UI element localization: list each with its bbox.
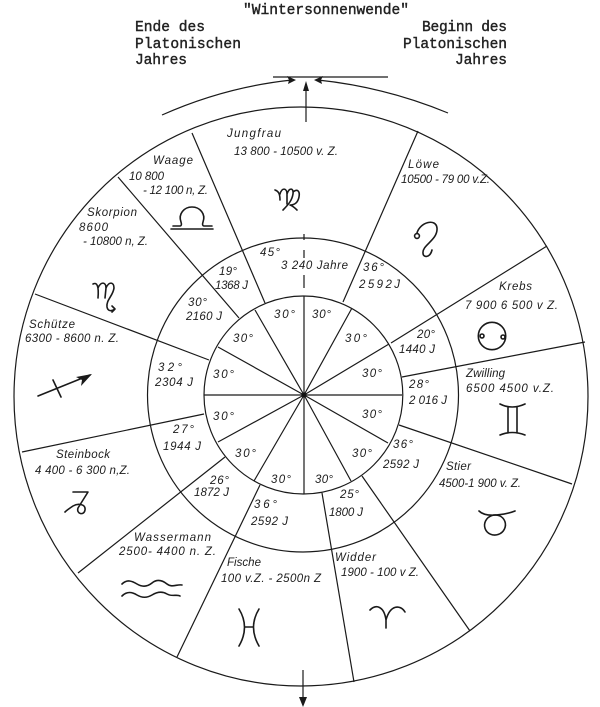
sign: Waage [129, 155, 213, 229]
text block: Ende des Platonischen Jahres: Ende des [135, 20, 205, 36]
sign: Steinbock [35, 449, 130, 514]
icon: Taurus symbol [479, 511, 515, 538]
inner ring labels: 30 degrees [213, 309, 382, 486]
middle ring labels: degrees and years: 27° [172, 424, 194, 436]
icon: Sagittarius symbol [38, 374, 92, 397]
sign: Widder: Widder [335, 552, 377, 564]
sign: Wassermann: Wassermann [134, 532, 211, 544]
icon: Aquarius symbol [122, 580, 182, 597]
sign: Wassermann: 2500- 4400 n. Z. [118, 546, 216, 558]
middle ring labels: degrees and years: 3 240 Jahre [281, 260, 348, 272]
inner ring labels: 30 degrees: 30° [312, 309, 331, 321]
sign: Löwe [401, 159, 490, 256]
middle ring labels: degrees and years: 2 016 J [408, 395, 447, 407]
middle ring labels: degrees and years: 30° [188, 297, 207, 309]
middle ring labels: degrees and years: 1800 J [329, 507, 363, 519]
sign: Skorpion: - 10800 n, Z. [83, 236, 148, 248]
icon: Libra symbol [171, 207, 213, 229]
icon: Leo symbol [415, 222, 437, 256]
middle ring labels: degrees and years: 2304 J [154, 377, 193, 389]
middle ring labels: degrees and years: 1944 J [163, 441, 201, 453]
sign: Stier: Stier [446, 461, 472, 473]
middle ring labels: degrees and years: 28° [408, 379, 429, 391]
icon: Capricorn symbol [65, 492, 88, 514]
dashed axis [303, 234, 305, 288]
sign: Schütze [25, 319, 119, 397]
inner ring labels: 30 degrees: 30° [345, 333, 367, 345]
icon: Gemini symbol [500, 404, 525, 435]
sign: Widder: 1900 - 100 v Z. [341, 567, 419, 579]
chart: zodiac wheel [14, 107, 588, 686]
sign: Steinbock: Steinbock [56, 449, 111, 461]
icon: Pisces symbol [239, 609, 259, 646]
middle ring labels: degrees and years: 1368 J [215, 280, 248, 292]
sign: Krebs: 7 900 6 500 v Z. [465, 300, 558, 312]
sign: Stier: 4500-1 900 v. Z. [439, 478, 521, 490]
sign: Fische [221, 557, 322, 646]
sign: Skorpion [79, 207, 148, 312]
middle ring labels: degrees and years: 2592 J [250, 516, 288, 528]
inner ring labels: 30 degrees: 30° [362, 409, 382, 421]
inner ring labels: 30 degrees: 30° [235, 448, 256, 460]
sign: Löwe: 10500 - 79 00 v.Z. [401, 174, 490, 186]
sign: Zwilling: Zwilling [465, 368, 506, 380]
inner ring labels: 30 degrees: 30° [233, 333, 253, 345]
icon: Scorpio symbol [93, 283, 115, 312]
middle ring labels: degrees and years: 2160 J [185, 311, 222, 323]
sign: Jungfrau [226, 128, 338, 210]
sign: Waage: Waage [153, 155, 193, 167]
sign: Widder [335, 552, 419, 628]
sign: Skorpion: Skorpion [87, 207, 137, 219]
inner ring labels: 30 degrees: 30° [352, 448, 372, 460]
top marker: arcs and arrows at the winter solstice [162, 76, 448, 122]
text block: Ende des Platonischen Jahres: Platonischen [135, 37, 241, 53]
middle ring labels: degrees and years: 1440 J [399, 344, 435, 356]
inner circle [204, 296, 403, 494]
sign: Löwe: Löwe [408, 159, 439, 171]
spokes: inner 30 degree divisions [204, 296, 402, 494]
sign: Schütze: 6300 - 8600 n. Z. [25, 333, 119, 345]
text block: Ende des Platonischen Jahres: Jahres [135, 53, 187, 69]
middle circle [148, 238, 458, 552]
middle ring labels: degrees and years: 20° [416, 329, 435, 341]
sign: Waage: 10 800 [129, 171, 165, 183]
middle ring labels: degrees and years [154, 247, 447, 528]
centre point [302, 392, 306, 398]
inner ring labels: 30 degrees: 30° [274, 309, 295, 321]
sign: Krebs [465, 281, 558, 350]
text block: Beginn des Platonischen Jahres: Jahres [455, 53, 507, 69]
outer circle [14, 107, 588, 686]
middle ring labels: degrees and years: 2592 J [382, 459, 419, 471]
icon: Aries symbol [370, 607, 405, 628]
icon: Cancer symbol [478, 322, 506, 350]
sign: Zwilling [465, 368, 554, 435]
inner ring labels: 30 degrees: 30° [213, 369, 234, 381]
sign: Jungfrau: Jungfrau [226, 128, 282, 140]
spokes: sign boundaries [22, 131, 585, 682]
middle ring labels: degrees and years: 36° [254, 499, 277, 511]
text block: Ende des Platonischen Jahres [135, 20, 241, 69]
middle ring labels: degrees and years: 26° [209, 475, 229, 487]
text block: Beginn des Platonischen Jahres [403, 20, 507, 69]
middle ring labels: degrees and years: 25° [339, 489, 359, 501]
middle ring labels: degrees and years: 45° [260, 247, 280, 259]
middle ring labels: degrees and years: 19° [219, 266, 237, 278]
inner ring labels: 30 degrees: 30° [362, 368, 382, 380]
inner ring labels: 30 degrees: 30° [213, 411, 234, 423]
heading: Wintersonnenwende: "Wintersonnenwende" [243, 3, 409, 19]
sign: Wassermann [118, 532, 216, 597]
middle ring labels: degrees and years: 36° [393, 439, 413, 451]
sign: Fische: Fische [227, 557, 261, 569]
icon: Virgo symbol [275, 189, 299, 210]
middle ring labels: degrees and years: 1872 J [194, 487, 229, 499]
sign: Schütze: Schütze [29, 319, 75, 331]
text block: Beginn des Platonischen Jahres: Platonischen [403, 37, 507, 53]
sign: Fische: 100 v.Z. - 2500n Z [221, 573, 322, 585]
text block: Beginn des Platonischen Jahres: Beginn des [422, 20, 507, 36]
bottom arrow [299, 670, 307, 707]
middle ring labels: degrees and years: 32° [158, 362, 182, 374]
sign: Waage: - 12 100 n, Z. [143, 185, 208, 197]
inner ring labels: 30 degrees: 30° [315, 474, 333, 486]
sign: Krebs: Krebs [499, 281, 532, 293]
sign: Skorpion: 8600 [79, 222, 109, 234]
sign: Zwilling: 6500 4500 v.Z. [466, 383, 554, 395]
middle ring labels: degrees and years: 36° [363, 262, 384, 274]
sign: Steinbock: 4 400 - 6 300 n,Z. [35, 465, 130, 477]
inner ring labels: 30 degrees: 30° [271, 474, 291, 486]
middle ring labels: degrees and years: 2 5 9 2 J [358, 279, 400, 291]
sign: Jungfrau: 13 800 - 10500 v. Z. [234, 146, 338, 158]
sign: Stier [439, 461, 521, 538]
